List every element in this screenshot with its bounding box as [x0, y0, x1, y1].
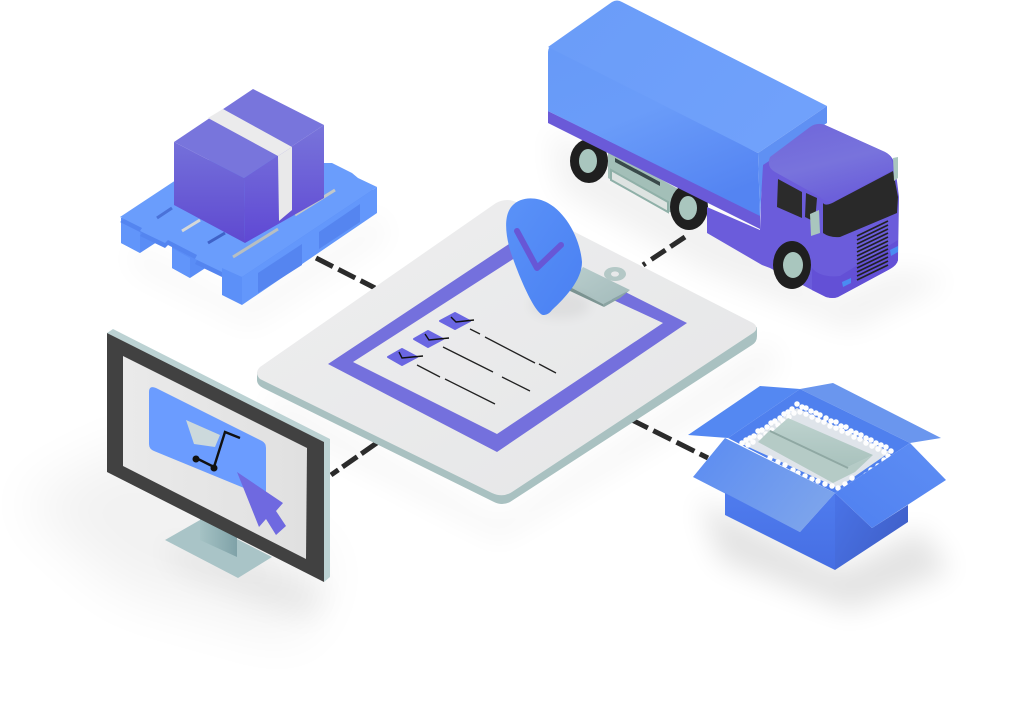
cursor arrow	[237, 472, 286, 535]
location pin	[506, 198, 582, 315]
product card	[149, 387, 266, 497]
back left flap	[688, 386, 800, 438]
pallet deck	[120, 130, 377, 277]
radiator grill	[857, 221, 888, 280]
cab roof	[769, 124, 893, 201]
clip	[570, 267, 630, 307]
side window rear	[777, 179, 802, 218]
front right flap	[835, 443, 946, 528]
mirrors	[810, 157, 898, 236]
packing peanuts	[742, 404, 891, 488]
pallet openings	[258, 244, 302, 293]
back right flap	[800, 383, 941, 443]
body right side	[835, 493, 908, 570]
pallet deck underside edge	[120, 135, 377, 286]
packed product	[758, 418, 873, 483]
shopping cart icon	[186, 420, 240, 472]
cab lower front	[812, 240, 898, 298]
clipboard checklist	[257, 198, 757, 504]
board edge	[257, 327, 757, 504]
box interior	[728, 389, 910, 493]
board surface	[257, 200, 756, 495]
connector: monitor to checklist	[331, 440, 381, 475]
cardboard box	[174, 89, 324, 243]
pin check mark	[517, 231, 561, 268]
monitor edge	[107, 329, 330, 582]
cargo front	[758, 106, 827, 216]
pallet blocks	[121, 215, 240, 278]
purple frame	[328, 238, 687, 452]
headlights	[842, 246, 898, 287]
monitor stand	[165, 515, 272, 578]
body left side	[725, 493, 835, 570]
pallet end of long board	[222, 268, 242, 305]
monitor screen	[123, 356, 307, 559]
cab body	[707, 124, 899, 298]
windshield	[823, 171, 898, 237]
side window front	[805, 193, 817, 222]
open parcel box	[688, 383, 946, 570]
monitor bezel	[107, 333, 324, 582]
pallet long front side	[242, 187, 377, 305]
checklist item 3	[388, 349, 495, 404]
cargo top	[548, 0, 827, 153]
front left flap	[693, 438, 835, 532]
delivery truck	[548, 0, 899, 298]
pallet with box	[120, 89, 377, 305]
pallet deck gaps	[157, 190, 335, 257]
pin shadow	[530, 292, 590, 318]
checklist item 1	[440, 313, 556, 373]
box tape	[208, 109, 292, 156]
connector: truck to checklist	[643, 237, 685, 265]
soft ground shadows	[20, 130, 950, 640]
connector: pallet to checklist	[316, 258, 375, 288]
fuel tank	[608, 150, 680, 212]
monitor with shopping cart	[107, 329, 330, 582]
cargo side	[548, 45, 760, 216]
checklist item 2	[414, 331, 530, 391]
connector: open box to checklist	[630, 419, 708, 458]
front wheel	[773, 241, 811, 289]
purple cargo base	[548, 111, 760, 229]
rear wheel	[570, 139, 608, 183]
middle wheel	[670, 184, 708, 230]
